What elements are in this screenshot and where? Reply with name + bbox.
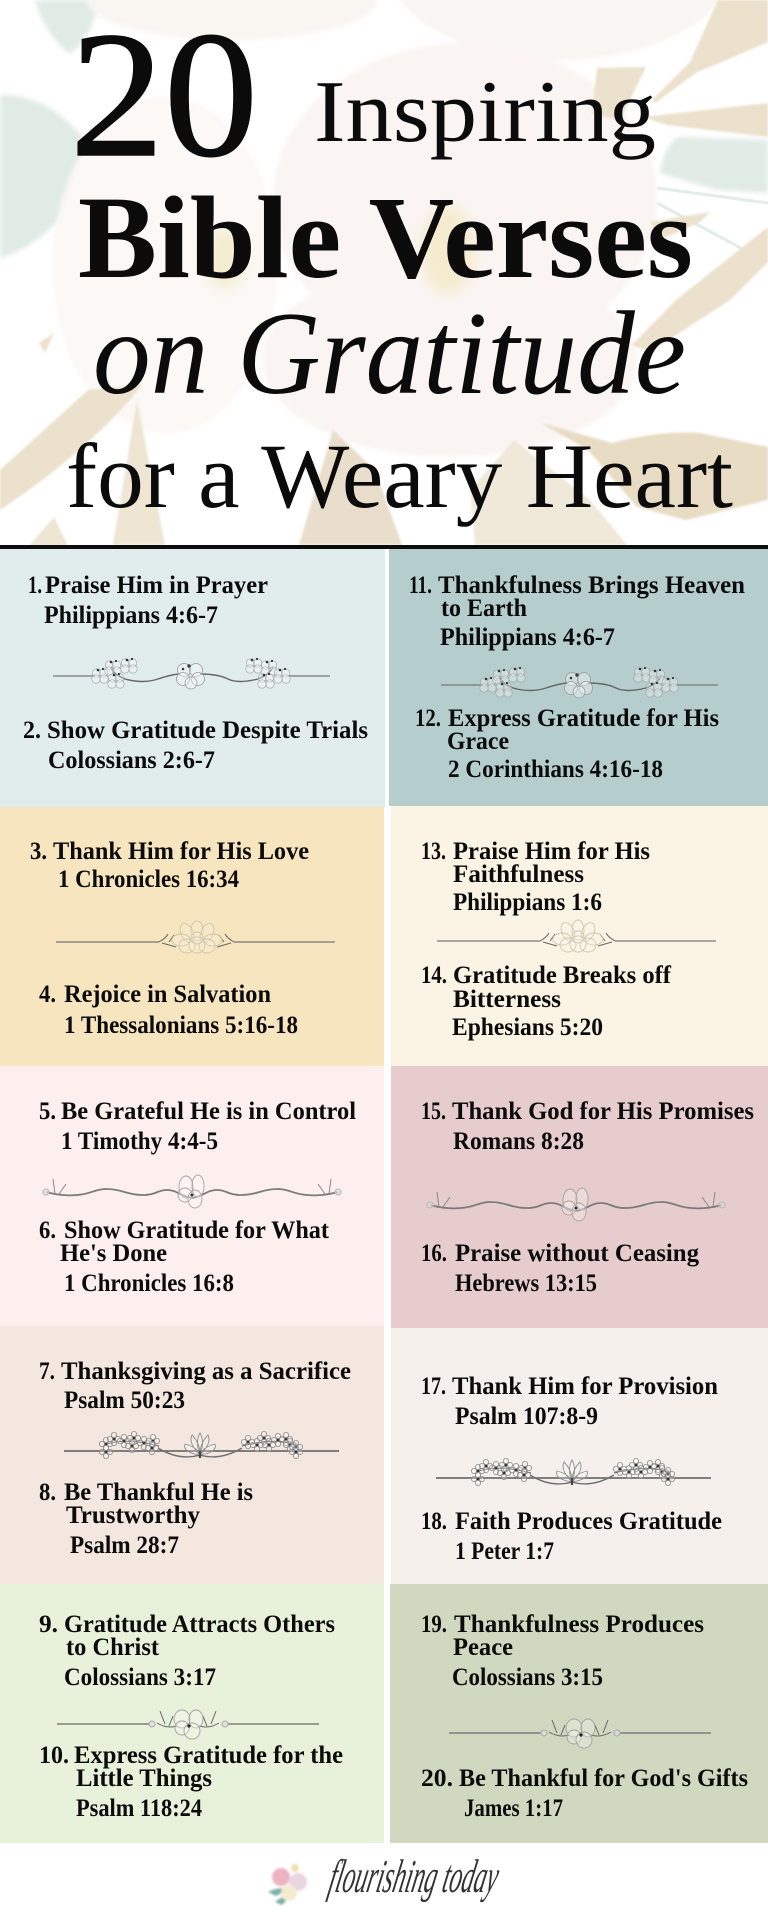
verse 19 xyxy=(421,1611,704,1691)
verse 11: Thankfulness Brings Heaven xyxy=(438,572,745,599)
verse 19: Peace xyxy=(453,1634,513,1661)
verse 14: Ephesians 5:20 xyxy=(452,1014,603,1041)
verse 17: Thank Him for Provision xyxy=(452,1373,718,1400)
title: 20: 20 xyxy=(70,0,258,194)
divider: lotus line xyxy=(436,1458,711,1486)
verse 12: Express Gratitude for His xyxy=(448,705,719,732)
verse 8: 8. xyxy=(39,1479,56,1506)
verse 1: Philippians 4:6-7 xyxy=(44,602,218,629)
divider: wavy vine xyxy=(427,1188,725,1221)
verse 3: 3. xyxy=(30,838,47,865)
verse 15: 15. xyxy=(421,1098,446,1125)
verse 9: Colossians 3:17 xyxy=(64,1664,216,1691)
panel: verses 1 and 2 xyxy=(0,549,385,807)
panel: verses 11 and 12 xyxy=(389,549,768,806)
verse 6: Show Gratitude for What xyxy=(64,1217,330,1244)
verse 19: Colossians 3:15 xyxy=(452,1664,603,1691)
verse 20: Be Thankful for God's Gifts xyxy=(459,1765,748,1792)
title: Inspiring: Inspiring xyxy=(314,64,656,161)
verse 6 xyxy=(39,1217,330,1297)
verse 6: 6. xyxy=(39,1217,56,1244)
verse 13 xyxy=(421,838,650,916)
verse 5 xyxy=(39,1098,356,1155)
panel: verses 17 and 18 xyxy=(391,1328,768,1584)
verse 16: Praise without Ceasing xyxy=(455,1240,699,1267)
panel: verses 3 and 4 xyxy=(0,807,384,1066)
verse 7: 7. xyxy=(39,1358,55,1385)
verse 7: Thanksgiving as a Sacrifice xyxy=(61,1358,351,1385)
verse 10: 10. xyxy=(39,1742,69,1769)
panel: verses 13 and 14 xyxy=(391,806,768,1066)
verse 16: 16. xyxy=(421,1240,447,1267)
verse 5: 1 Timothy 4:4-5 xyxy=(61,1128,218,1155)
divider: magnolia line xyxy=(57,1710,319,1739)
verse 20: James 1:17 xyxy=(464,1795,563,1822)
verse 17: Psalm 107:8-9 xyxy=(455,1403,598,1430)
divider: magnolia line xyxy=(449,1719,711,1748)
verse 9: 9. xyxy=(39,1611,58,1638)
verse 15: Thank God for His Promises xyxy=(452,1098,754,1125)
verse 10: Express Gratitude for the xyxy=(74,1742,343,1769)
verse 8 xyxy=(39,1479,253,1559)
title: Bible Verses: Bible Verses xyxy=(78,172,693,303)
verse 11 xyxy=(409,572,745,651)
divider: lotus line xyxy=(64,1431,339,1459)
verse 7: Psalm 50:23 xyxy=(64,1387,185,1414)
verse 6: He's Done xyxy=(60,1240,167,1267)
panel: verses 5 and 6 xyxy=(0,1066,384,1326)
verse 4: Rejoice in Salvation xyxy=(64,981,271,1008)
verse 15: Romans 8:28 xyxy=(453,1128,584,1155)
verse 6: 1 Chronicles 16:8 xyxy=(64,1270,234,1297)
verse 18: 18. xyxy=(421,1508,447,1535)
verse 4: 1 Thessalonians 5:16-18 xyxy=(64,1012,298,1039)
divider: flower line xyxy=(437,920,716,952)
verse 12: 12. xyxy=(415,705,441,732)
verse 2: 2. xyxy=(23,717,41,744)
icon: flower bouquet xyxy=(268,1864,307,1905)
verse 16: Hebrews 13:15 xyxy=(455,1270,597,1297)
verse 14: Bitterness xyxy=(453,986,561,1013)
verse 15 xyxy=(421,1098,754,1155)
verse 17: 17. xyxy=(421,1373,446,1400)
verse 5: 5. xyxy=(39,1098,56,1125)
verse 12: 2 Corinthians 4:16-18 xyxy=(448,756,663,783)
title: for a Weary Heart: for a Weary Heart xyxy=(66,425,733,527)
verse 9: Gratitude Attracts Others xyxy=(64,1611,335,1638)
verse 1 xyxy=(28,572,268,629)
header: watercolor floral background xyxy=(0,0,768,546)
verse 3 xyxy=(30,838,309,893)
verse 2 xyxy=(23,717,368,774)
verse 17 xyxy=(421,1373,718,1430)
verse 16 xyxy=(421,1240,699,1297)
verse 18 xyxy=(421,1508,722,1565)
verse 11: 11. xyxy=(409,572,432,599)
verse 7 xyxy=(39,1358,351,1414)
title: on Gratitude: on Gratitude xyxy=(93,287,686,419)
verse 10: Little Things xyxy=(76,1765,212,1792)
verse 11: Philippians 4:6-7 xyxy=(440,624,615,651)
verse 8: Psalm 28:7 xyxy=(70,1532,179,1559)
verse 9: to Christ xyxy=(66,1634,160,1661)
panel: verses 15 and 16 xyxy=(391,1066,768,1328)
verse 2: Colossians 2:6-7 xyxy=(48,747,215,774)
verse 9 xyxy=(39,1611,335,1691)
verse 4: 4. xyxy=(39,981,56,1008)
divider: wavy vine xyxy=(43,1175,341,1208)
verse 19: Thankfulness Produces xyxy=(454,1611,704,1638)
verse 2: Show Gratitude Despite Trials xyxy=(47,717,368,744)
verse 10: Psalm 118:24 xyxy=(76,1795,202,1822)
divider: floral sprig xyxy=(441,667,718,698)
verse 11: to Earth xyxy=(441,595,527,622)
verse 14: Gratitude Breaks off xyxy=(453,962,672,989)
verse 12 xyxy=(415,705,719,783)
verse 18: 1 Peter 1:7 xyxy=(455,1538,554,1565)
verse 13: Philippians 1:6 xyxy=(453,889,602,916)
header rule xyxy=(0,545,768,549)
footer logo xyxy=(268,1851,504,1905)
brand script text: flourishing today xyxy=(325,1851,504,1903)
verse 10 xyxy=(39,1742,343,1822)
verse 20: 20. xyxy=(421,1765,453,1792)
verse 13: Praise Him for His xyxy=(453,838,650,865)
divider: floral sprig xyxy=(53,658,330,689)
verse 4 xyxy=(39,981,298,1039)
verse 3: 1 Chronicles 16:34 xyxy=(58,866,239,893)
verse 8: Trustworthy xyxy=(66,1502,200,1529)
divider: flower line xyxy=(56,921,335,953)
panel: verses 19 and 20 xyxy=(390,1584,768,1843)
verse 14 xyxy=(421,962,672,1041)
verse 1: 1. xyxy=(28,572,42,599)
verse 8: Be Thankful He is xyxy=(64,1479,253,1506)
title xyxy=(66,0,733,527)
verse 12: Grace xyxy=(447,728,509,755)
panel: verses 7 and 8 xyxy=(0,1326,384,1584)
panel: verses 9 and 10 xyxy=(0,1584,384,1843)
verse 18: Faith Produces Gratitude xyxy=(455,1508,722,1535)
verse 5: Be Grateful He is in Control xyxy=(61,1098,356,1125)
verse 3: Thank Him for His Love xyxy=(53,838,309,865)
verse 13: 13. xyxy=(421,838,446,865)
verse 14: 14. xyxy=(421,962,447,989)
verse 13: Faithfulness xyxy=(453,861,584,888)
verse 20 xyxy=(421,1765,748,1822)
verse 19: 19. xyxy=(421,1611,447,1638)
verse 1: Praise Him in Prayer xyxy=(45,572,268,599)
